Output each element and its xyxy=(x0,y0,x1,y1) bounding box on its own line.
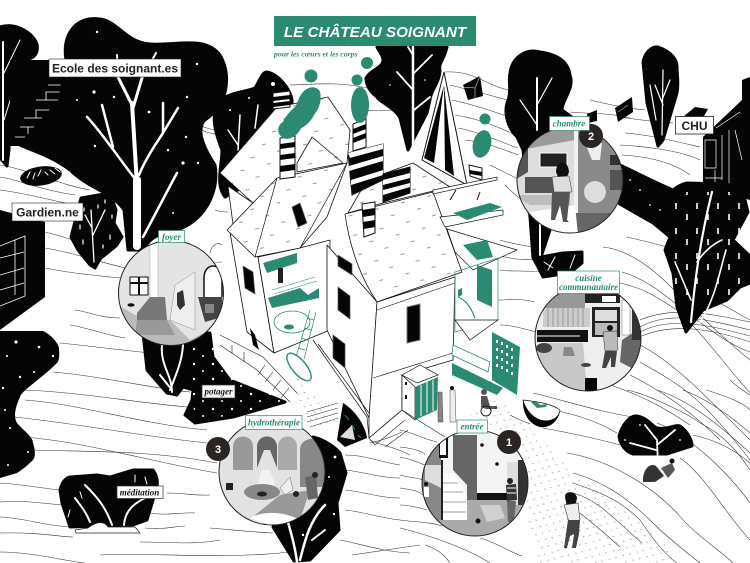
roof: left xyxy=(227,163,347,257)
stairs in foreground xyxy=(307,403,338,427)
label: méditation: méditation xyxy=(120,488,159,498)
label: potager: potager xyxy=(204,386,233,396)
wall: left wing xyxy=(230,232,274,353)
label: Gardien.ne: Gardien.ne xyxy=(16,206,79,220)
building: Ecole des soignant.es xyxy=(10,60,72,146)
teal smoke xyxy=(280,57,494,160)
tree: potager xyxy=(143,333,285,423)
bowl-shaped fountain xyxy=(523,400,560,427)
circle: foyer xyxy=(118,242,224,346)
conical tower xyxy=(422,72,467,185)
label: cuisine communautaire: cuisine xyxy=(575,273,602,283)
tree with seated people xyxy=(619,416,692,482)
label: entrée: entrée xyxy=(460,422,484,432)
wall: back left wing xyxy=(228,186,258,257)
ladder xyxy=(296,310,316,359)
teal façade grid xyxy=(452,332,520,395)
title: LE CHÂTEAU SOIGNANT xyxy=(284,23,468,41)
label: cuisine communautaire xyxy=(558,271,620,294)
dotted path to the entrance xyxy=(470,398,680,563)
person standing in the garden xyxy=(564,492,580,548)
people at the entrance xyxy=(438,386,497,422)
house: left face xyxy=(313,245,377,438)
tree: big left xyxy=(20,19,227,250)
circle: chambre xyxy=(516,130,624,234)
badge: 2 xyxy=(579,124,603,148)
label: foyer: foyer xyxy=(162,232,181,242)
label: potager xyxy=(202,385,235,398)
tree: behind castle left xyxy=(214,72,292,197)
building: CHU xyxy=(703,77,750,200)
tree: near Gardien xyxy=(71,193,122,268)
window on roof xyxy=(292,203,307,227)
badge: 2: 2 xyxy=(588,131,594,143)
tree: large right xyxy=(618,165,750,332)
tree: left blob, bottom xyxy=(0,331,59,478)
tree: far left xyxy=(0,26,37,166)
castle xyxy=(220,57,520,447)
badge: 1 xyxy=(497,430,521,454)
roof: small gable xyxy=(297,137,343,172)
label: entrée xyxy=(457,420,488,433)
tree: narrow right xyxy=(643,47,678,146)
circle: entrée xyxy=(420,428,530,540)
building: Gardien.ne xyxy=(0,210,45,330)
house: right face xyxy=(369,277,455,438)
icon: small houses xyxy=(463,76,708,123)
circle: hydrothérapie xyxy=(218,426,326,526)
badge: 1: 1 xyxy=(506,437,512,449)
subtitle: pour les cœurs et les corps xyxy=(273,50,358,58)
circle: cuisine communautaire xyxy=(534,294,642,392)
roof: front house xyxy=(345,192,462,302)
striped chimneys xyxy=(273,91,482,237)
title xyxy=(274,16,476,46)
roof: back right xyxy=(348,163,450,213)
label: chambre xyxy=(550,116,590,130)
boat-shaped canopy xyxy=(283,349,315,385)
label: CHU xyxy=(676,116,714,134)
label: hydrothérapie: hydrothérapie xyxy=(248,418,300,428)
tree: hydrothérapie xyxy=(273,437,346,562)
balconies xyxy=(433,177,517,340)
label: foyer xyxy=(158,230,184,242)
label: Ecole des soignant.es: Ecole des soignant.es xyxy=(52,62,178,76)
stairs xyxy=(220,335,297,402)
tree: top centre xyxy=(366,47,447,150)
badge: 3: 3 xyxy=(215,444,221,456)
cutaway interior xyxy=(258,240,330,353)
label: cuisine communautaire: communautaire xyxy=(559,282,618,292)
base steps xyxy=(369,410,445,447)
roof: upper back xyxy=(220,97,350,203)
label: méditation xyxy=(117,486,163,498)
dark planter xyxy=(337,403,367,447)
tree: méditation with lying figure xyxy=(60,470,157,533)
label: chambre: chambre xyxy=(553,118,585,128)
tree: chambre xyxy=(506,51,590,277)
bush: upper-left lawn xyxy=(19,164,63,188)
dotted courtyard xyxy=(295,375,340,425)
badge: 3 xyxy=(206,437,230,461)
entry porch xyxy=(402,365,438,420)
label: CHU: CHU xyxy=(682,119,708,133)
label: hydrothérapie xyxy=(246,416,302,430)
label: Gardien.ne xyxy=(12,203,83,221)
